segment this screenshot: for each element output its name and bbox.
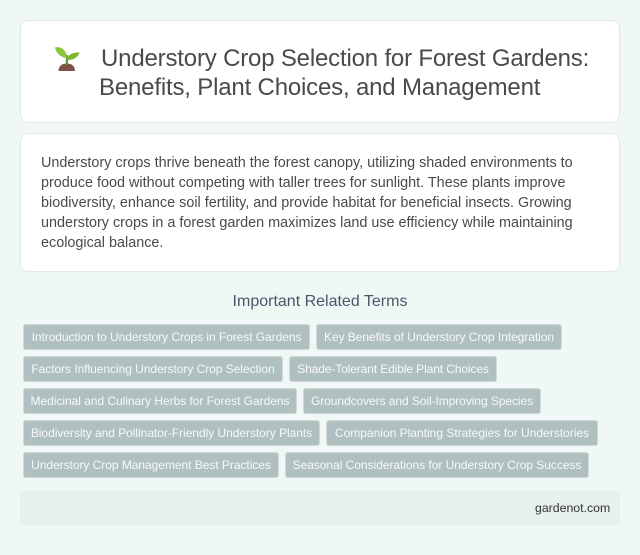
tag [316, 324, 562, 350]
tag [326, 420, 598, 446]
tag [23, 452, 279, 478]
text block: description: biodiversity, enhance soil fertility, and provide habitat for beneficial insects. Growing [41, 195, 572, 211]
tag: Seasonal Considerations for Understory Crop Success [293, 458, 581, 472]
tag: Companion Planting Strategies for Understories [335, 426, 589, 440]
tag [23, 324, 310, 350]
tag [289, 356, 497, 382]
text block: description [41, 155, 573, 251]
tag: Shade-Tolerant Edible Plant Choices [297, 362, 489, 376]
tag: Medicinal and Culinary Herbs for Forest Gardens [31, 394, 289, 408]
tag [285, 452, 589, 478]
tag: Factors Influencing Understory Crop Selection [31, 362, 275, 376]
text block: description: ecological balance. [41, 235, 163, 251]
heading: title line 2: Benefits, Plant Choices, and Management [99, 74, 540, 101]
tag: Understory Crop Management Best Practices [31, 458, 271, 472]
text block: description: understory crops in a forest garden maximizes land use efficiency while maintaining [41, 215, 573, 231]
tag: Introduction to Understory Crops in Forest Gardens [32, 330, 301, 344]
tag: Groundcovers and Soil-Improving Species [311, 394, 533, 408]
text block: description: Understory crops thrive beneath the forest canopy, utilizing shaded environments to [41, 155, 573, 171]
tag [23, 388, 297, 414]
text: footer source: gardenot.com [535, 501, 610, 515]
panel: description card [20, 133, 620, 272]
icon: seedling [55, 47, 80, 71]
tag [23, 356, 283, 382]
tag [303, 388, 541, 414]
panel: title card [20, 20, 620, 123]
tag [23, 420, 320, 446]
tag: Key Benefits of Understory Crop Integration [324, 330, 554, 344]
text block: description: produce food without competing with taller trees for sunlight. These plants improve [41, 175, 565, 191]
heading: title line 1: Understory Crop Selection for Forest Gardens: [101, 45, 589, 72]
tag: Biodiversity and Pollinator-Friendly Understory Plants [31, 426, 312, 440]
panel: footer [20, 491, 620, 525]
heading: important related terms: Important Related Terms [233, 293, 407, 310]
panel: related term tags [23, 324, 598, 478]
